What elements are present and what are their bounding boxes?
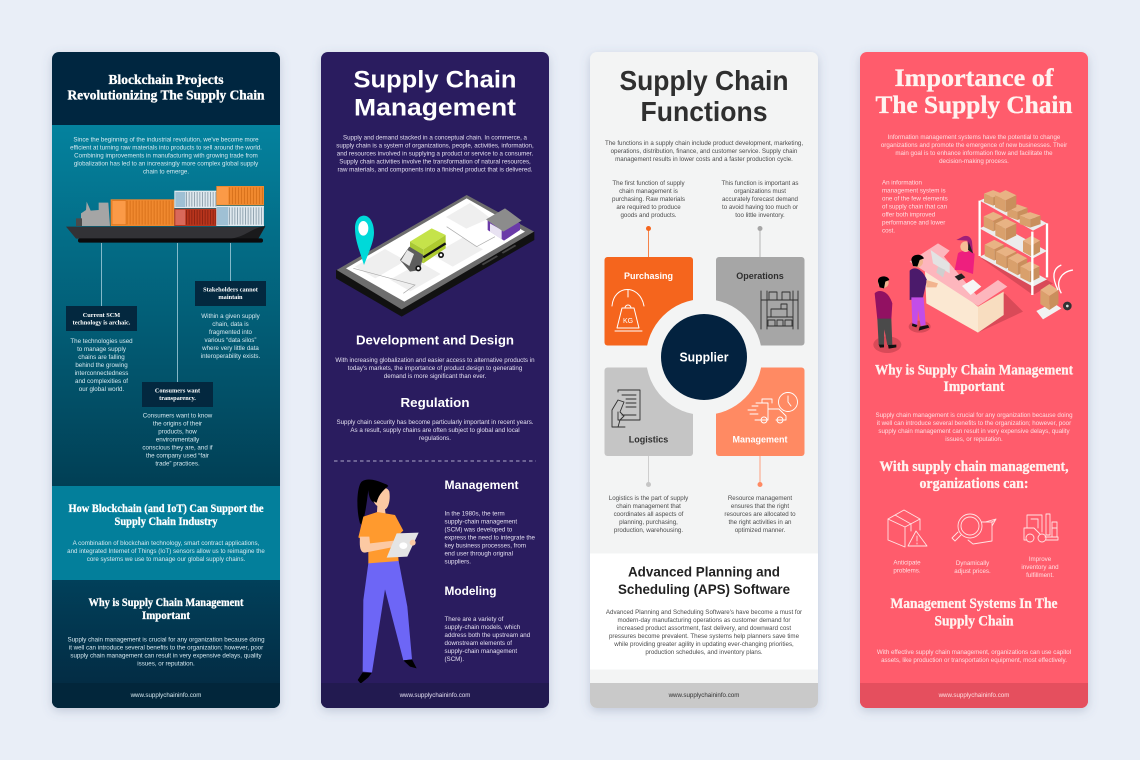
section: management: supply-chain management [444,518,517,526]
text: resource management: ensures that the right [731,503,789,510]
icon: document in hand [612,390,640,427]
text: logistics: coordinates all aspects of [614,511,684,518]
callout text: stakeholders: interoperability exists. [201,353,261,360]
section: regulation [336,395,534,442]
section: why important [875,362,1073,443]
band: how blockchain supports: How Blockchain (and IoT) Can Support the [68,503,264,515]
card: logistics [604,368,693,456]
card: operations: Operations [736,271,784,281]
callout text: consumers: conscious they are, and if [142,444,213,452]
footer [590,683,818,708]
section: management systems: assets, like production or transportation equipment, most effectively. [881,657,1067,664]
intro text [605,140,803,163]
monitor [931,250,981,295]
section: why important: supply chain management can result in very expensive delays, quality [70,652,263,660]
label: improve inventory: inventory and [1021,564,1059,571]
callout text: consumers: Consumers want to know [143,412,213,420]
footer [321,683,549,708]
text: purchasing: goods and products. [620,212,677,219]
callout text: consumers: the company used “fair [146,452,209,460]
section: advanced planning: pressures become prevalent. These systems help planners save time [609,633,800,640]
section: management: key business processes, from [444,542,526,550]
section: development and design: today's markets, the importance of product design to generating [348,365,523,372]
text: operations: to avoid having too much or [722,204,798,211]
cashier [955,236,975,274]
text: operations: accurately forecast demand [722,196,799,203]
icon: forklift [1024,514,1058,542]
section: why important: issues, or reputation. [137,660,195,668]
section: management: express the need to integrate the [444,534,536,542]
band: how blockchain supports: core systems we use to manage our global supply chains. [87,556,246,563]
icon: warehouse [486,208,522,241]
callout text: stakeholders: where very little data [201,345,259,352]
callout text: current SCM: interconnectedness [75,370,128,377]
heading: supply chain functions [620,65,788,127]
heading: supply chain functions: Supply Chain [620,65,788,96]
connector: management [758,456,762,487]
section: management: In the 1980s, the term [444,510,505,518]
text: logistics: production, warehousing. [614,527,683,534]
section: advanced planning: Advanced Planning and [628,564,780,580]
callout text: consumers: trade” practices. [155,460,200,468]
callout text: current SCM: our global world. [79,386,124,393]
intro text [881,134,1067,165]
heading: supply chain functions: Functions [640,96,768,127]
callout: consumers [142,382,213,407]
connector: logistics [646,456,651,487]
card: purchasing [604,257,693,346]
icon: location pin [355,216,374,265]
section: modeling: (SCM). [444,656,464,663]
footer [52,683,280,708]
section: regulation: Supply chain security has become particularly important in recent years. [336,419,534,426]
intro text: efficient at turning raw materials into products to sell around the world. [70,144,262,152]
intro text: main goal is to enhance information flow and facilitate the [895,150,1053,157]
connector lines [102,243,230,382]
section: modeling [444,586,531,663]
callout: stakeholders: maintain [218,294,243,301]
section: management: end user through original [444,550,513,558]
footer: www.supplychaininfo.com [130,692,201,699]
label: improve inventory: Improve [1029,556,1052,563]
heading: with supply chain management: organizations can: [920,476,1028,492]
side text: performance and lower [882,220,945,226]
section: management [444,480,536,566]
text: resource management: resources are allocated to [724,511,796,518]
heading: blockchain projects: Revolutionizing The Supply Chain [68,88,265,102]
intro text: management results in lower costs and a faster production cycle. [615,156,793,163]
side text [882,180,948,234]
section: management systems: Management Systems In The [890,596,1058,612]
connector: operations [758,226,762,257]
card: operations [716,257,804,346]
footer: www.supplychaininfo.com [668,692,739,699]
footer [860,683,1088,708]
intro text: organizations and promote the emergence of new businesses. Their [881,142,1067,149]
footer: www.supplychaininfo.com [399,692,470,699]
section: regulation: As a result, supply chains are often subject to global and local [350,427,520,434]
text: operations: organizations must [734,188,786,195]
callout: consumers: Consumers want [155,388,201,394]
callout text: stakeholders: chain, data is [212,321,249,328]
section: why important [52,580,280,684]
intro text: chain to emerge. [143,168,189,176]
section: management systems [877,596,1071,664]
section: why important: it well can introduce several benefits to the organization; however, poor [877,420,1071,427]
callout text: consumers: environmentally [156,436,200,444]
band: how blockchain supports: A combination of blockchain technology, smart contract applications, [73,540,260,547]
section: why important: Important [142,610,190,622]
panel: supply chain functions [590,52,818,708]
text: purchasing: purchasing. Raw materials [612,196,685,203]
side text: one of the few elements [882,196,948,202]
card: purchasing: Purchasing [624,271,673,281]
callout text: stakeholders: fragmented into [209,329,253,336]
counter [910,243,1007,333]
footer: www.supplychaininfo.com [938,692,1009,699]
card: management: Management [732,434,788,444]
section: advanced planning: modern-day manufacturing operations as customer demand for [618,617,790,624]
panel: blockchain projects [52,52,280,708]
section: regulation: Regulation [400,395,470,410]
heading: importance [876,65,1073,119]
text: logistics [609,495,689,534]
panel: importance of the supply chain [860,52,1088,708]
section: why important: supply chain management can result in very expensive delays, quality [878,428,1071,435]
intro text: Supply and demand stacked in a conceptual chain. In commerce, a [343,134,528,142]
text: purchasing: chain management is [619,188,678,195]
illustration: phone map with truck [336,195,534,317]
label: dynamically adjust prices [954,560,991,575]
text: resource management: Resource management [728,495,792,502]
label: anticipate [893,560,921,574]
label: improve inventory: fulfillment. [1026,572,1054,579]
heading: importance: The Supply Chain [876,92,1073,119]
callout text: stakeholders: Within a given supply [201,313,261,320]
text: purchasing: The first function of supply [612,180,686,187]
section: modeling: Modeling [444,586,496,598]
label: dynamically adjust prices: adjust prices. [954,568,991,575]
heading: with supply chain management [880,459,1069,492]
section: why important: issues, or reputation. [945,436,1003,443]
section: advanced planning: while providing greater agility in updating ever-changing priorities, [613,641,794,648]
section: why important: Supply chain management is crucial for any organization because doing [875,412,1073,419]
heading: with supply chain management: With supply chain management, [880,459,1069,475]
icon: delivery truck [400,228,446,272]
label: dynamically adjust prices: Dynamically [956,560,990,567]
intro text: and resources involved in supplying a product or service to a consumer. [337,150,533,158]
text: logistics: Logistics is the part of supply [609,495,689,502]
callout: current SCM: Current SCM [83,312,120,319]
icon: scale weight: KG [623,318,633,325]
section: development and design: Development and Design [356,334,514,348]
heading: blockchain projects [68,72,265,102]
intro text: The functions in a supply chain include product development, marketing, [605,140,803,147]
text: purchasing [612,180,686,219]
customer back [873,276,901,353]
heading: supply chain management: Supply Chain [354,66,516,94]
heading: blockchain projects: Blockchain Projects [108,72,224,87]
callout: current SCM [66,306,137,331]
side text: of supply chain that can [882,204,948,210]
callout text: current SCM: and complexities of [75,378,128,385]
side text: An information [882,180,922,186]
section: regulation: regulations. [419,435,451,442]
side text: cost. [882,228,895,234]
section: modeling: supply-chain models, which [444,624,521,631]
intro text: Supply chain activities involve the transformation of natural resources, [339,158,531,166]
section: modeling: There are a variety of [444,616,504,623]
callout text: current SCM [70,338,133,393]
band: how blockchain supports: Supply Chain Industry [114,516,218,528]
section: management systems: Supply Chain [934,614,1014,630]
card: logistics: Logistics [629,434,668,444]
callout: stakeholders [195,281,266,306]
callout: stakeholders: Stakeholders cannot [203,286,259,294]
icon: warehouse shelves [761,291,798,329]
text: resource management [724,495,796,534]
section: advanced planning: Advanced Planning and Scheduling Software's have become a must for [606,609,802,616]
label: anticipate: problems. [893,568,921,574]
callout text: current SCM: to manage supply [77,346,127,353]
text: purchasing: are required to produce [616,204,681,211]
text: resource management: the right activities in an [729,519,792,526]
illustration: container ship [66,186,265,243]
intro text: Information management systems have the potential to change [888,134,1061,141]
text: operations [721,180,799,219]
band: how blockchain supports: and integrated Internet of Things (IoT) sensors allow us to reimagine the [67,548,265,555]
icon: magnifier on box [952,514,996,544]
intro text [336,134,534,174]
section: management: Management [444,480,519,492]
shelving with boxes [980,190,1047,295]
icon: box with warning [888,510,927,547]
section: modeling: address both the upstream and [444,632,531,639]
heading: importance: Importance of [894,65,1054,92]
callout text: current SCM: behind the growing [75,362,128,369]
section: management: suppliers. [444,558,471,566]
text: resource management: optimized manner. [735,527,786,534]
callout text: current SCM: chains are falling [78,354,125,361]
intro text: Since the beginning of the industrial revolution, we've become more [73,136,259,144]
section: advanced planning: Scheduling (APS) Software [618,581,790,597]
side text: management system is [882,188,946,194]
intro text: raw materials, and components into a finished product that is delivered. [337,166,533,174]
section: management: (SCM) was developed to [444,526,513,534]
section: development and design: With increasing globalization and easier access to alternative products in [335,357,535,364]
band: how blockchain supports [52,486,280,580]
text: logistics: chain management that [616,503,681,510]
intro text: decision-making process. [939,158,1009,165]
label: improve inventory [1021,556,1059,579]
side text: offer both improved [882,212,936,218]
text: operations: too little inventory. [735,212,785,219]
heading: supply chain management: Management [354,94,516,122]
connector: purchasing [646,226,651,257]
intro text: supply chain is a system of organizations, people, activities, information, [336,142,534,150]
intro text: Combining improvements in manufacturing with growing trade from [74,152,258,160]
panel: supply chain management [321,52,549,708]
text: operations: This function is important as [721,180,799,187]
card: management [716,368,804,456]
callout text: stakeholders: various “data silos” [205,337,256,344]
callout: consumers: transparency. [159,395,196,402]
callout text: consumers: the origins of their [153,420,202,428]
intro text: operations, distribution, finance, and customer service. Supply chain [611,148,798,155]
section: why important: Why is Supply Chain Management [875,362,1073,378]
callout text: stakeholders [201,313,261,360]
callout text: consumers: products, how [158,428,197,436]
section: why important: Why is Supply Chain Management [88,597,244,609]
callout text: current SCM: The technologies used [70,338,133,345]
text: logistics: planning, purchasing, [619,519,678,526]
section: modeling: supply-chain management [444,648,517,655]
section: advanced planning: production schedules, and inventory plans. [645,649,763,656]
hand truck [1036,265,1073,319]
section: development and design: demand is more significant than ever. [384,373,487,380]
intro text [70,136,262,176]
customer front [909,255,938,333]
heading: supply chain management [354,66,516,122]
section: advanced planning [590,554,818,670]
section: why important: Important [944,379,1004,395]
illustration: warehouse counter [873,190,1073,353]
section: why important: Supply chain management is crucial for any organization because doing [67,636,265,644]
section: development and design [335,334,535,380]
illustration: woman with tablet [357,480,419,684]
section: management systems: With effective supply chain management, organizations can use capitol [877,649,1071,656]
intro text: globalization has led to an increasingly more complex global supply [74,160,259,168]
callout text: consumers [142,412,213,468]
center circle: supplier [646,299,762,415]
section: why important: it well can introduce several benefits to the organization; however, poor [69,644,263,652]
label: anticipate: Anticipate [893,560,921,566]
callout: current SCM: technology is archaic. [73,320,131,326]
center circle: supplier: Supplier [680,350,729,364]
icon: delivery truck with clock [748,392,798,423]
section: modeling: downstream elements of [444,640,512,647]
section: advanced planning: increased product assortment, fast delivery, and downward cost [617,625,791,632]
